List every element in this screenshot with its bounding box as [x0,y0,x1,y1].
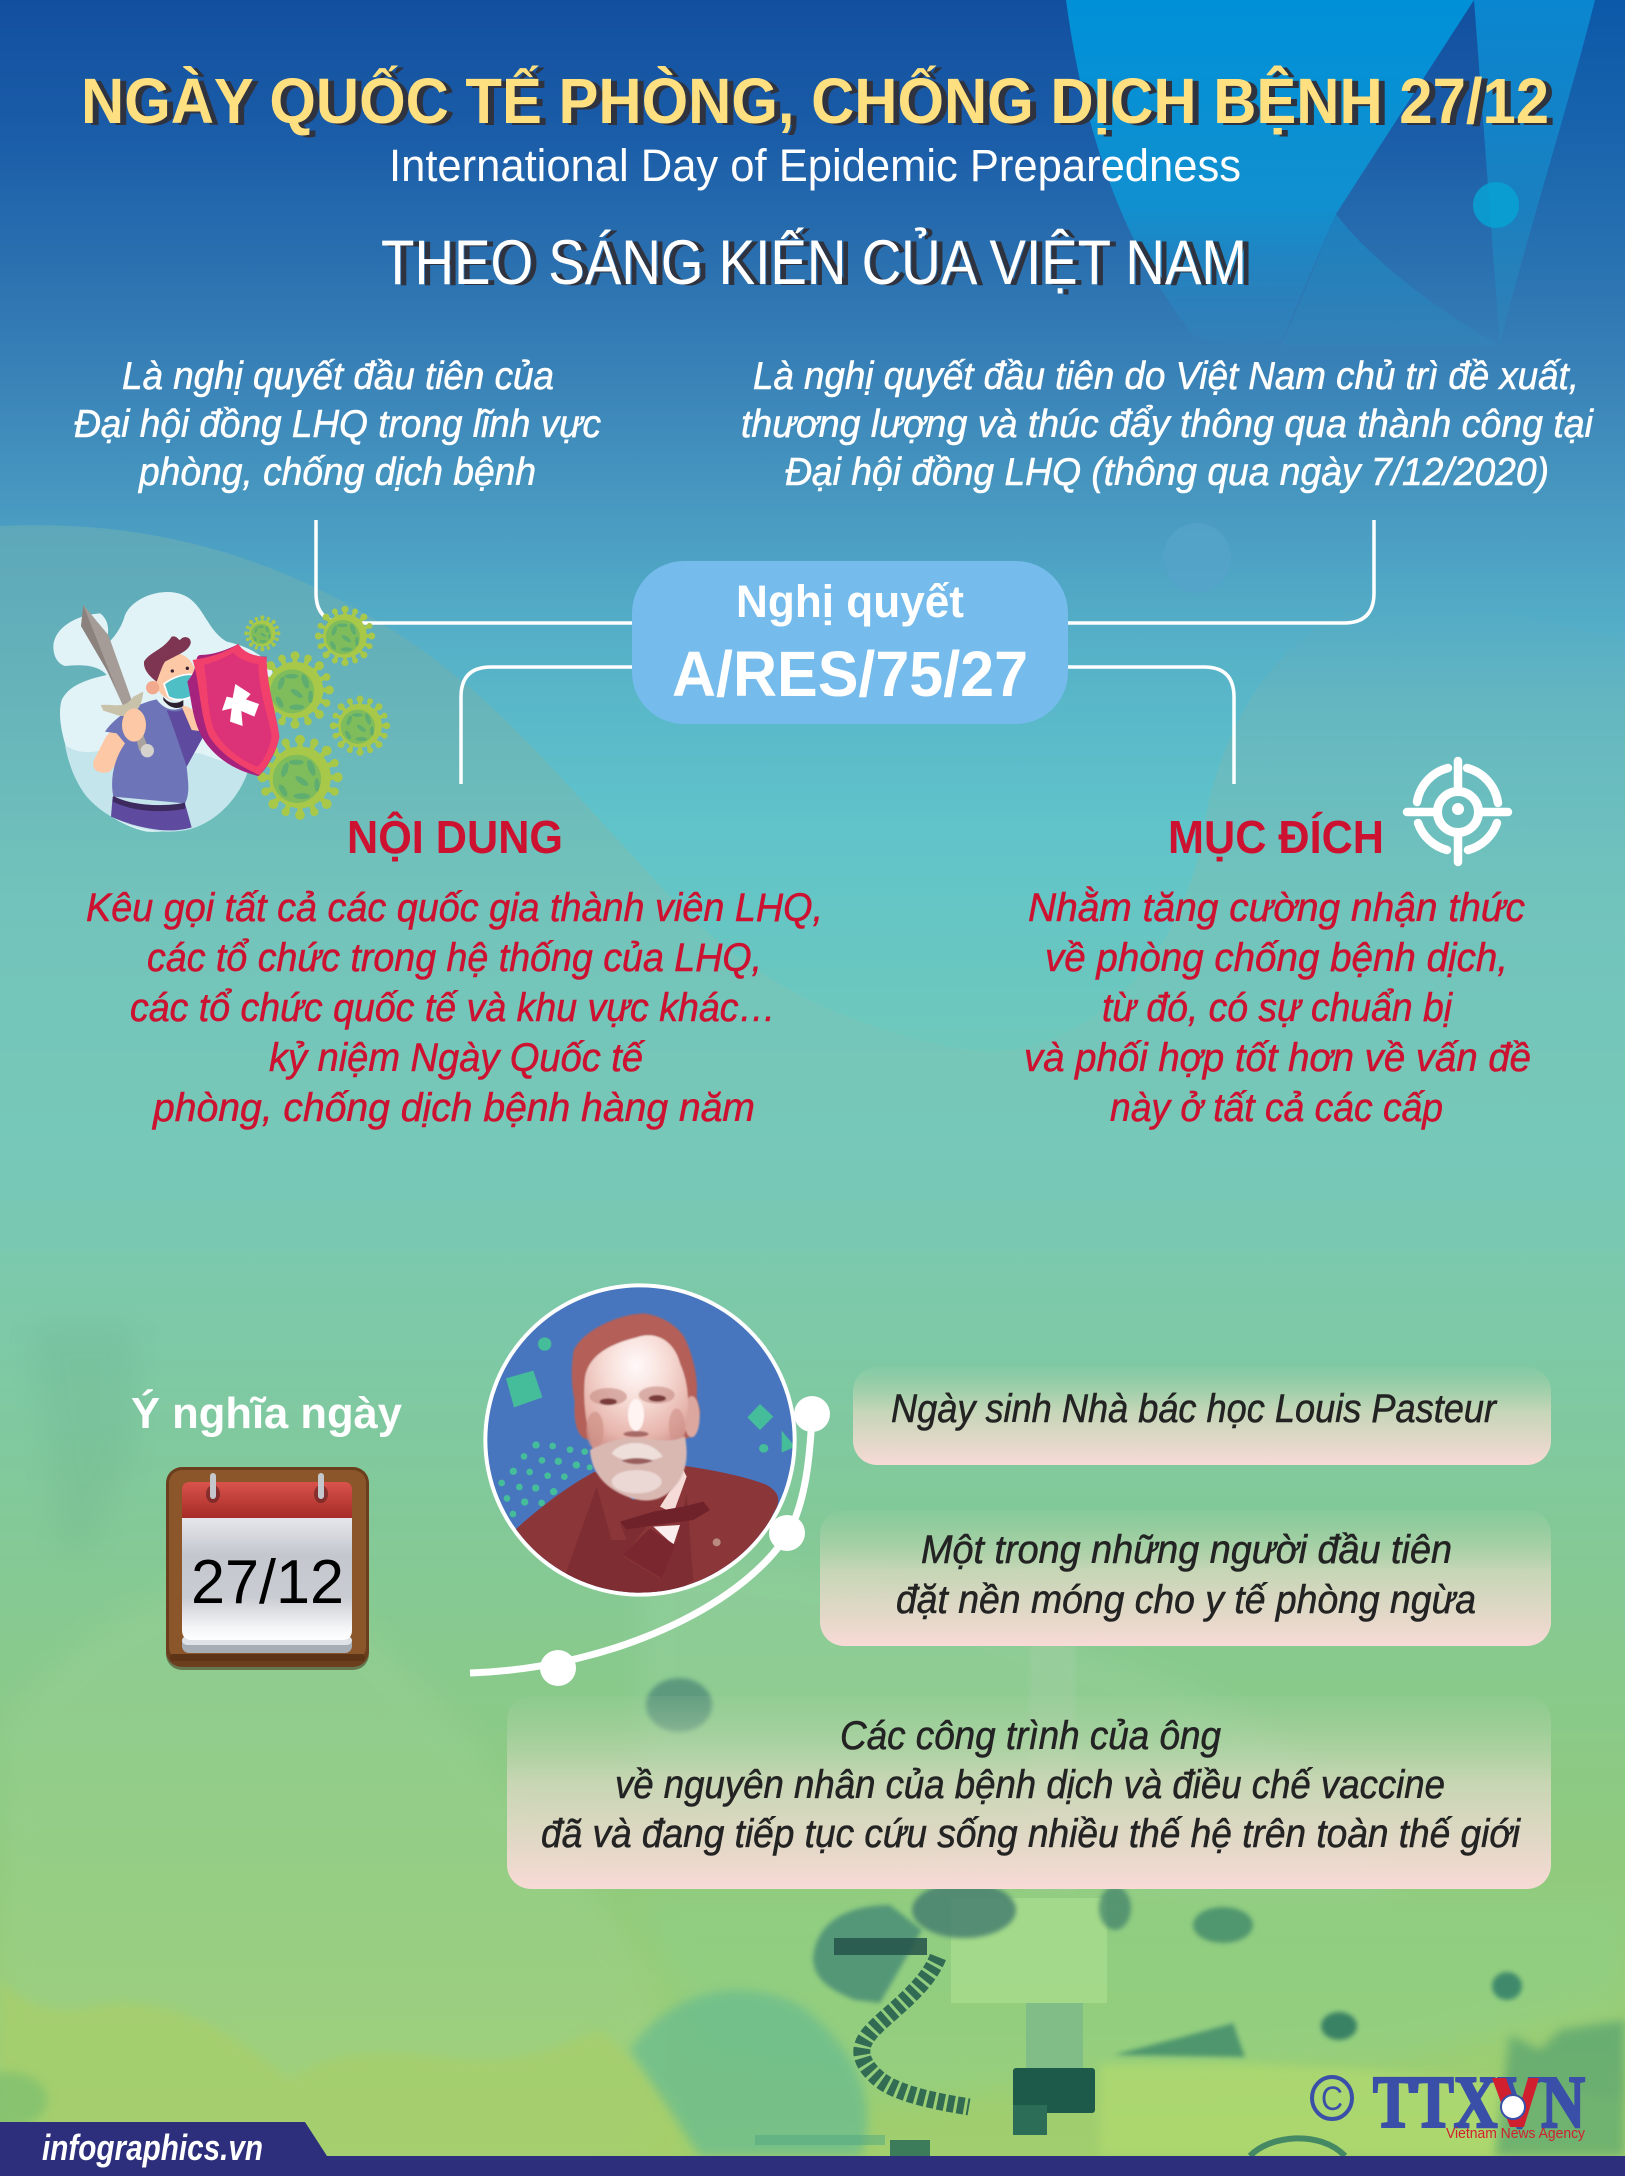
hand on sword [122,708,146,742]
text block: first resolution on epidemic prevention [74,355,601,494]
pill label: Nghị quyết [736,576,964,627]
text block: purpose description [1024,885,1531,1130]
cross [222,684,259,726]
logo: TTXVN [1312,2062,1585,2144]
coat [515,1466,778,1600]
pants [111,797,192,830]
shield [187,644,279,776]
connector lines [316,520,1374,784]
shoulder [182,706,204,732]
panel text: đã và đang tiếp tục cứu sống nhiều thế hệ trên toàn thế giới [541,1812,1521,1856]
portrait: Louis Pasteur [483,1283,797,1600]
icon: target [1407,761,1508,862]
illustration: man with sword and shield against viruses [53,592,390,832]
logo: TTXVN: TTXVN [1373,2062,1585,2144]
text block: first resolution proposed by Vietnam [741,355,1594,494]
decorative shapes [498,1337,795,1517]
subtitle: International Day of Epidemic Preparedness [389,140,1241,191]
footer website: infographics.vn [42,2127,263,2168]
mask [164,674,195,700]
panel text: về nguyên nhân của bệnh dịch và điều chế vaccine [615,1763,1445,1807]
footer band [0,2122,1625,2176]
eyes [600,1398,617,1405]
nose [628,1399,644,1431]
resolution pill [632,561,1068,724]
bow tie [620,1502,710,1529]
sword [81,605,132,707]
ear [684,1396,700,1437]
text block: purpose description: Nhằm tăng cường nhận thức [1028,885,1525,930]
text block: content description: kỷ niệm Ngày Quốc tế [269,1036,646,1080]
shirt collar [660,1470,687,1513]
panel text: Các công trình của ông [840,1714,1221,1758]
heading: content: NỘI DUNG [347,811,563,863]
heading: initiative of Vietnam: THEO SÁNG KIẾN CỦA VIỆT NAM [381,227,1247,298]
text block: content description [86,886,823,1130]
heading: meaning of the day: Ý nghĩa ngày [131,1388,403,1438]
eyes [171,669,174,673]
heading: purpose: MỤC ĐÍCH [1168,811,1384,863]
panel text [896,1528,1476,1622]
brow shadows [590,1388,627,1405]
calendar date: 27/12 [191,1548,344,1617]
text block: purpose description: về phòng chống bệnh dịch, [1045,936,1508,980]
sword guard and hilt [135,731,148,751]
panel: Louis Pasteur's birthday [853,1367,1551,1465]
hair [144,636,191,682]
text block: first resolution on epidemic prevention: Là nghị quyết đầu tiên của [122,355,554,398]
text block: purpose description: này ở tất cả các cấp [1110,1086,1443,1130]
beard [590,1437,687,1500]
text block: purpose description: và phối hợp tốt hơn về vấn đề [1024,1036,1531,1080]
text block: first resolution proposed by Vietnam: Đại hội đồng LHQ (thông qua ngày 7/12/2020) [785,451,1549,494]
white blob [53,592,274,832]
curve with timeline dots [470,1396,830,1686]
cheek shading [586,1412,604,1448]
text block: content description: các tổ chức quốc tế và khu vực khác… [130,986,776,1030]
logo: TTXVN: Vietnam News Agency [1446,2125,1585,2142]
text block: first resolution proposed by Vietnam: Là nghị quyết đầu tiên do Việt Nam chủ trì đề xuất, [753,355,1579,398]
face [584,1335,688,1457]
text block: content description: các tổ chức trong hệ thống của LHQ, [147,936,762,980]
title: NGÀY QUỐC TẾ PHÒNG, CHỐNG DỊCH BỆNH 27/12 [81,64,1549,137]
head and face [572,1313,700,1500]
resolution number: A/RES/75/27 [672,638,1028,710]
head [154,653,196,700]
text block: content description: Kêu gọi tất cả các quốc gia thành viên LHQ, [86,886,823,930]
panel: his works save generations [507,1696,1551,1889]
text block: content description: phòng, chống dịch bệnh hàng năm [152,1086,755,1130]
hair [572,1313,700,1440]
icon: calendar 27/12 [166,1467,369,1670]
panel text: Một trong những người đầu tiên [921,1528,1452,1572]
arm [93,717,137,773]
panel: founder of preventive medicine [820,1510,1551,1646]
body shirt [105,699,205,803]
text block: first resolution on epidemic prevention: Đại hội đồng LHQ trong lĩnh vực [74,403,601,446]
text block: first resolution proposed by Vietnam: thương lượng và thúc đẩy thông qua thành công tại [741,403,1594,446]
panel text: đặt nền móng cho y tế phòng ngừa [896,1578,1476,1622]
text block: first resolution on epidemic prevention: phòng, chống dịch bệnh [138,451,536,494]
panel text: Ngày sinh Nhà bác học Louis Pasteur [891,1387,1498,1431]
logo: TTXVN: C [1321,2080,1343,2118]
background: blurred laboratory photo [0,1325,1625,2170]
text block: purpose description: từ đó, có sự chuẩn bị [1102,986,1453,1030]
viruses [244,615,280,651]
panel text [541,1714,1521,1856]
